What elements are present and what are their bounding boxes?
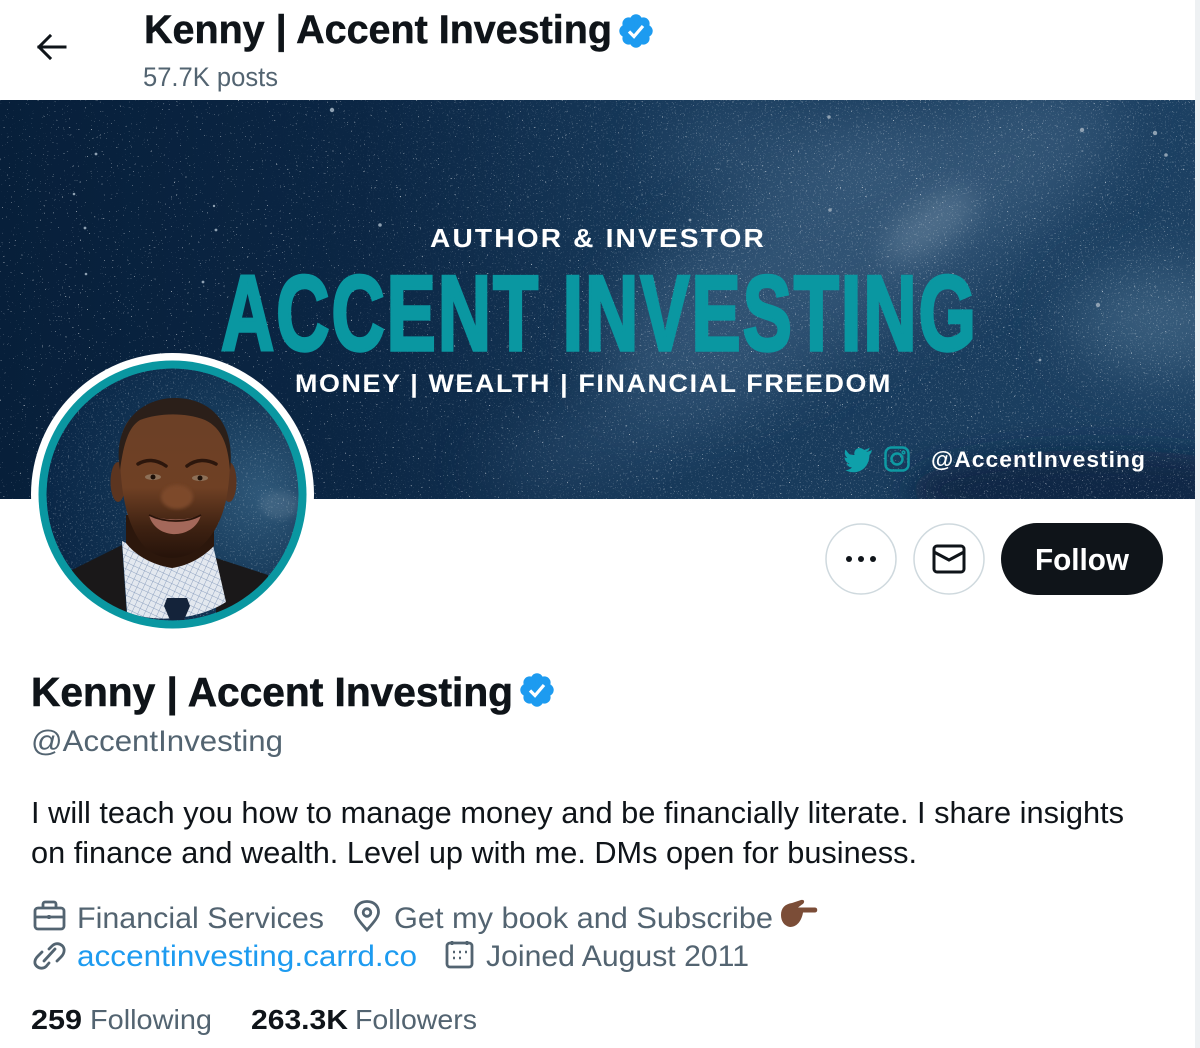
avatar: tie (164, 598, 190, 620)
meta: location: Get my book and Subscribe (394, 902, 773, 935)
avatar: ears (110, 462, 124, 502)
header: back arrow (39, 36, 65, 58)
bio: on finance and wealth. Level up with me. DMs open for business. (31, 835, 917, 870)
profile name: Kenny | Accent Investing (31, 669, 513, 715)
profile handle: @AccentInvesting (31, 725, 283, 758)
following count (31, 1004, 212, 1035)
header: post count: 57.7K posts (143, 62, 278, 92)
meta: category: Financial Services (77, 902, 324, 935)
icon: twitter bird (844, 448, 872, 472)
followers count (251, 1004, 477, 1035)
avatar: head (120, 414, 230, 540)
following count: Following (90, 1004, 212, 1035)
button: more (826, 524, 896, 594)
icon: link (35, 944, 64, 968)
banner handle: @AccentInvesting (931, 447, 1146, 472)
banner headline: tagline: MONEY | WEALTH | FINANCIAL FREEDOM (295, 370, 892, 398)
button: follow (1001, 523, 1163, 595)
banner star field (0, 100, 1195, 499)
bio: I will teach you how to manage money and be financially literate. I share insights (31, 795, 1124, 830)
avatar: nose (161, 485, 193, 509)
avatar: shirt (122, 541, 226, 619)
meta: joined date: Joined August 2011 (486, 940, 749, 973)
icon: location pin (356, 902, 378, 930)
avatar: neck (126, 515, 214, 568)
avatar (31, 353, 314, 640)
button: message (914, 524, 984, 594)
bio (31, 795, 1124, 870)
banner headline: author and investor: AUTHOR & INVESTOR (430, 223, 766, 253)
meta: website link: accentinvesting.carrd.co (77, 940, 417, 973)
avatar: hair (119, 398, 231, 470)
icon: calendar (447, 941, 472, 967)
followers count: 263.3K (251, 1004, 348, 1035)
icon: pointing hand (781, 900, 817, 927)
profile verified badge (520, 673, 554, 707)
button: follow: Follow (1035, 542, 1130, 577)
banner nebula (525, 100, 1195, 499)
header: verified badge (619, 14, 653, 48)
following count: 259 (31, 1004, 82, 1035)
right edge strip (1195, 0, 1200, 1048)
avatar: jacket (72, 545, 268, 613)
header: account name: Kenny | Accent Investing (144, 8, 612, 52)
followers count: Followers (355, 1004, 477, 1035)
banner (0, 100, 1195, 499)
icon: briefcase (35, 902, 64, 929)
icon: instagram (886, 448, 908, 470)
avatar: brows and eyes (138, 460, 216, 466)
avatar: lips (149, 515, 201, 534)
